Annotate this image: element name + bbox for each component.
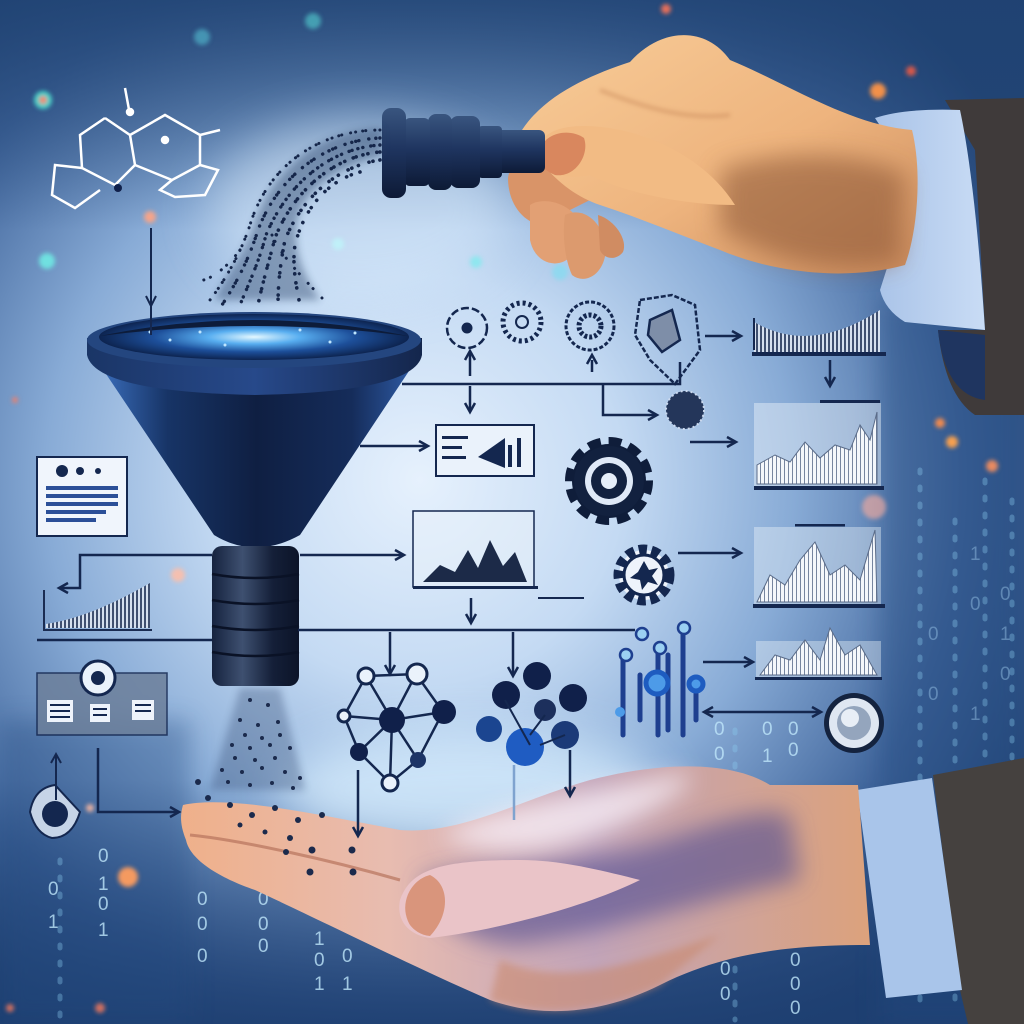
background binary digit streams: 1 (98, 874, 109, 895)
map-like polygon icon (635, 295, 700, 384)
lens disc icon (824, 693, 884, 753)
right side binary digits: 1 (970, 544, 981, 565)
background binary digit streams (48, 719, 801, 1019)
medium gear icon (619, 550, 669, 600)
background binary digit streams: 0 (720, 959, 731, 980)
funnel glowing mouth (99, 314, 409, 360)
background binary digit streams: 0 (258, 914, 269, 935)
small textured disc (666, 391, 704, 429)
row of gear outline icons (447, 302, 614, 350)
particles falling from stem to palm (195, 688, 356, 876)
background binary digit streams: 0 (790, 998, 801, 1019)
cluster bubbles icon (476, 662, 587, 820)
background binary digit streams: 0 (714, 744, 725, 765)
right side binary digits: 0 (970, 594, 981, 615)
background binary digit streams: 0 (314, 950, 325, 971)
mountain chart panel (413, 511, 584, 599)
background binary digit streams: 0 (790, 974, 801, 995)
right side binary digits: 0 (1000, 584, 1011, 605)
background binary digit streams: 1 (48, 912, 59, 933)
background binary digit streams: 1 (762, 746, 773, 767)
shirt cuff (875, 110, 985, 330)
large gear icon (572, 444, 646, 518)
background binary digit streams: 1 (342, 974, 353, 995)
chart panel two (753, 524, 885, 608)
lower hand (181, 758, 1024, 1024)
right side binary digits: 0 (928, 684, 939, 705)
background binary digit streams: 1 (314, 974, 325, 995)
curled fingers (508, 161, 590, 225)
background binary digit streams: 0 (720, 984, 731, 1005)
background binary digit streams: 0 (788, 740, 799, 761)
right side binary digits: 1 (1000, 624, 1011, 645)
funnel cone (98, 362, 415, 548)
circuit tree icon (615, 622, 703, 735)
left arrow from molecule to funnel (146, 228, 156, 335)
background binary digit streams: 0 (342, 946, 353, 967)
mini area chart left (44, 583, 152, 630)
background binary digit streams: 1 (314, 929, 325, 950)
right side binary digits: 1 (970, 704, 981, 725)
background binary digit streams: 0 (762, 719, 773, 740)
background binary digit streams: 0 (98, 846, 109, 867)
background binary digit streams: 0 (788, 719, 799, 740)
background binary digit streams: 0 (790, 950, 801, 971)
funnel (87, 312, 422, 686)
background binary digit streams: 0 (197, 889, 208, 910)
chart panel (754, 400, 884, 490)
right side binary digits: 0 (1000, 664, 1011, 685)
right side binary digits (928, 544, 1011, 725)
small sensor icon (30, 754, 80, 838)
background binary digit streams: 1 (98, 920, 109, 941)
background binary digit streams: 0 (48, 879, 59, 900)
settings panel icon (37, 661, 167, 735)
right side binary digits: 0 (928, 624, 939, 645)
palm (181, 766, 870, 1011)
background binary digit streams: 0 (258, 889, 269, 910)
document with triangle chart (436, 425, 534, 476)
chart panel three (755, 628, 882, 680)
thumb (538, 126, 735, 205)
top right chart (752, 310, 886, 356)
molecule icon (52, 88, 220, 208)
background binary digit streams: 0 (714, 719, 725, 740)
shirt cuff (857, 778, 962, 998)
nozzle (382, 108, 545, 198)
hand back (522, 35, 918, 273)
falling particle stream into funnel (192, 128, 382, 305)
connector lines network (37, 331, 835, 836)
background binary digit streams: 0 (197, 914, 208, 935)
funnel stem (212, 546, 299, 686)
network graph icon (338, 664, 456, 791)
background binary digit streams: 0 (98, 894, 109, 915)
suit sleeve (938, 98, 1024, 415)
funnel rim (87, 338, 422, 395)
thumb (399, 860, 640, 938)
background binary digit streams: 0 (258, 936, 269, 957)
suit sleeve (933, 758, 1024, 1024)
document icon (37, 457, 127, 536)
background binary digit streams: 0 (197, 946, 208, 967)
top hand holding nozzle (508, 35, 1024, 415)
